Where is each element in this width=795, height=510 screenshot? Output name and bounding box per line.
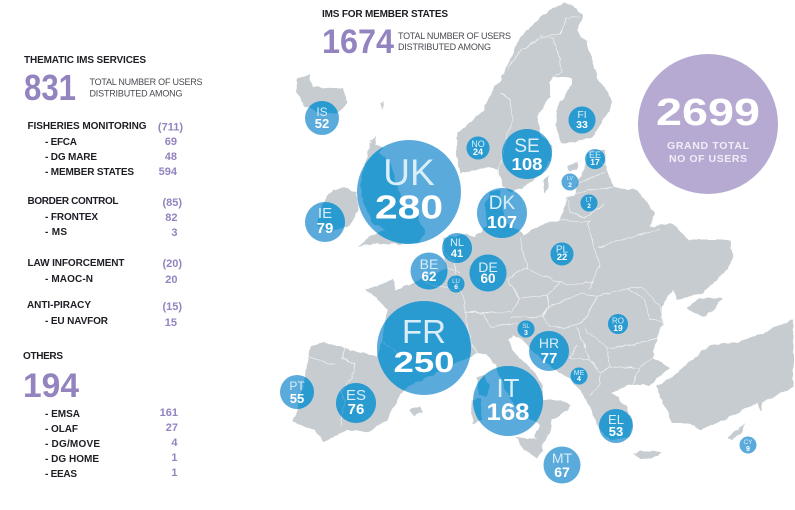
bubble: EL (608, 412, 624, 439)
bubble: HR: HR (539, 335, 559, 351)
map of Europe (293, 3, 793, 458)
bubble: FR (394, 313, 454, 379)
heading: thematic IMS services: DISTRIBUTED AMONG (90, 88, 182, 98)
bubble: NL (450, 237, 464, 260)
list: law inforcement: - MAOC-N (45, 274, 93, 285)
bubble: EL: EL (608, 412, 624, 427)
list: anti-piracy: (15) (162, 301, 182, 313)
bubble: BE: BE (420, 256, 438, 272)
bubble: DK: 107 (487, 212, 517, 232)
bubble: PT (289, 379, 305, 406)
bubble: LV: LV (567, 176, 573, 182)
bubble: IT: IT (496, 373, 520, 403)
bubble: NL: NL (450, 237, 464, 249)
bubble: LT (586, 198, 593, 210)
bubble: CY: 9 (746, 446, 750, 453)
grand total circle (638, 54, 778, 194)
list: fisheries monitoring: FISHERIES MONITORING (28, 121, 147, 132)
bubble: ES (346, 387, 366, 418)
bubble: SE: 108 (512, 154, 543, 174)
bubble: ME (574, 370, 585, 383)
data bubbles over the map (280, 101, 756, 484)
heading: thematic IMS services: TOTAL NUMBER OF USERS (90, 77, 202, 87)
bubble: FI: FI (577, 109, 587, 121)
list: others: 1 (171, 467, 178, 479)
bubble: NO (471, 139, 485, 157)
bubble: SE (512, 136, 543, 174)
list: others: - DG HOME (45, 454, 99, 465)
list: anti-piracy: ANTI-PIRACY (27, 300, 91, 311)
bubble: ES: 76 (348, 401, 364, 418)
bubble: DE: DE (478, 259, 498, 275)
bubble: PL: PL (556, 244, 569, 256)
bubble labels (289, 105, 753, 480)
bubble: MT (552, 450, 573, 480)
bubble: LT: LT (586, 198, 593, 204)
grand total circle: NO OF USERS (669, 153, 747, 165)
bubble: ME: 4 (577, 376, 581, 383)
bubble: BE: 62 (421, 269, 437, 284)
bubble: DE: 60 (480, 271, 496, 286)
list: law inforcement: LAW INFORCEMENT (28, 258, 124, 269)
list: others: 161 (160, 407, 178, 419)
heading: IMS for member states: IMS FOR MEMBER STATES (322, 9, 448, 20)
bubble: FI (576, 109, 588, 131)
list: law inforcement (28, 258, 182, 286)
heading: IMS for member states: TOTAL NUMBER OF USERS (398, 31, 511, 41)
list: anti-piracy (27, 300, 182, 329)
bubble: HR: 77 (541, 350, 557, 367)
list: fisheries monitoring: 594 (159, 166, 178, 178)
bubble: EE: EE (589, 150, 601, 160)
bubble: EE (589, 150, 601, 167)
list: others: 27 (166, 422, 178, 434)
list: others (23, 351, 178, 480)
bubble: SL: SL (522, 324, 530, 330)
list: border control: - MS (45, 227, 67, 238)
list: law inforcement: (20) (162, 258, 182, 270)
bubble: IS (315, 105, 329, 131)
list: border control: 82 (165, 212, 178, 224)
heading: thematic IMS services: 831 (24, 67, 76, 108)
bubble: CY (743, 439, 753, 453)
bubble: NO: 24 (473, 147, 483, 157)
bubble: CY: CY (743, 439, 753, 446)
bubble: IE: IE (318, 205, 332, 222)
list: others: - EMSA (45, 409, 80, 420)
bubble: LU (452, 279, 460, 291)
bubble: UK: UK (383, 152, 435, 193)
bubble: IT: 168 (486, 399, 530, 426)
bubble: UK: 280 (375, 188, 443, 226)
bubble: MT: 67 (554, 464, 570, 480)
list: fisheries monitoring (28, 121, 183, 178)
bubble: EL: 53 (609, 424, 623, 439)
bubble: RO: 19 (613, 323, 623, 333)
bubble: SL: 3 (524, 330, 528, 337)
bubble: IS: IS (316, 105, 328, 119)
bubble: IE: 79 (317, 220, 333, 237)
bubble: LV (567, 176, 573, 189)
list: border control: (85) (162, 197, 182, 209)
bubble: SE: SE (514, 136, 540, 157)
bubble: SL (522, 324, 530, 337)
heading: IMS for member states: 1674 (322, 23, 394, 61)
bubble: LV: 2 (568, 182, 572, 189)
bubble: LT: 2 (587, 203, 591, 210)
bubble: RO: RO (612, 316, 624, 326)
list: border control: BORDER CONTROL (28, 196, 118, 207)
grand total circle: GRAND TOTAL (667, 140, 750, 152)
bubble: MT: MT (552, 450, 573, 466)
bubble: IE (317, 205, 333, 237)
bubble: DK: DK (489, 193, 516, 214)
list: fisheries monitoring: - DG MARE (45, 152, 97, 163)
bubble: RO (612, 316, 624, 333)
bubble: ES: ES (346, 387, 366, 404)
list: fisheries monitoring: (711) (158, 122, 183, 134)
list: others: 1 (171, 452, 178, 464)
bubble: FR: 250 (394, 347, 454, 379)
bubble: DK (487, 193, 517, 232)
list: law inforcement: 20 (165, 274, 178, 286)
bubble: EE: 17 (590, 157, 600, 167)
list: others: - DG/MOVE (45, 439, 100, 450)
bubble: ME: ME (574, 370, 585, 377)
bubble: PL: 22 (557, 252, 567, 263)
bubble: NO: NO (471, 139, 485, 149)
bubble: LU: LU (452, 279, 460, 285)
bubble: DE (478, 259, 498, 286)
bubble: LU: 6 (454, 284, 458, 291)
bubble: NL: 41 (451, 248, 463, 260)
list: others: 4 (171, 437, 178, 449)
list: fisheries monitoring: - EFCA (45, 137, 77, 148)
heading: IMS for member states (322, 9, 511, 61)
bubble: IS: 52 (315, 116, 329, 131)
bubble: PT: PT (289, 379, 305, 393)
list: anti-piracy: - EU NAVFOR (45, 316, 109, 327)
grand total circle: 2699 (656, 92, 760, 134)
bubble: FR: FR (402, 313, 446, 350)
list: fisheries monitoring: 69 (165, 136, 177, 148)
list: others: - EEAS (45, 469, 77, 480)
list: border control: 3 (171, 227, 178, 239)
heading: IMS for member states: DISTRIBUTED AMONG (398, 42, 491, 52)
bubble: HR (539, 335, 559, 367)
bubble: FI: 33 (576, 119, 588, 131)
list: fisheries monitoring: - MEMBER STATES (45, 167, 134, 178)
heading: thematic IMS services (24, 55, 202, 108)
list: others: - OLAF (45, 424, 78, 435)
list: others: 194 (23, 367, 79, 405)
heading: thematic IMS services: THEMATIC IMS SERVICES (24, 55, 146, 66)
bubble: IT (486, 373, 530, 426)
bubble: PL (556, 244, 569, 263)
list: anti-piracy: 15 (165, 317, 177, 329)
bubble: PT: 55 (290, 391, 304, 406)
list: border control: - FRONTEX (45, 212, 98, 223)
list: others: OTHERS (23, 351, 63, 362)
list: border control (28, 196, 182, 239)
list: fisheries monitoring: 48 (165, 151, 177, 163)
bubble: BE (420, 256, 438, 284)
bubble: UK (375, 152, 443, 226)
